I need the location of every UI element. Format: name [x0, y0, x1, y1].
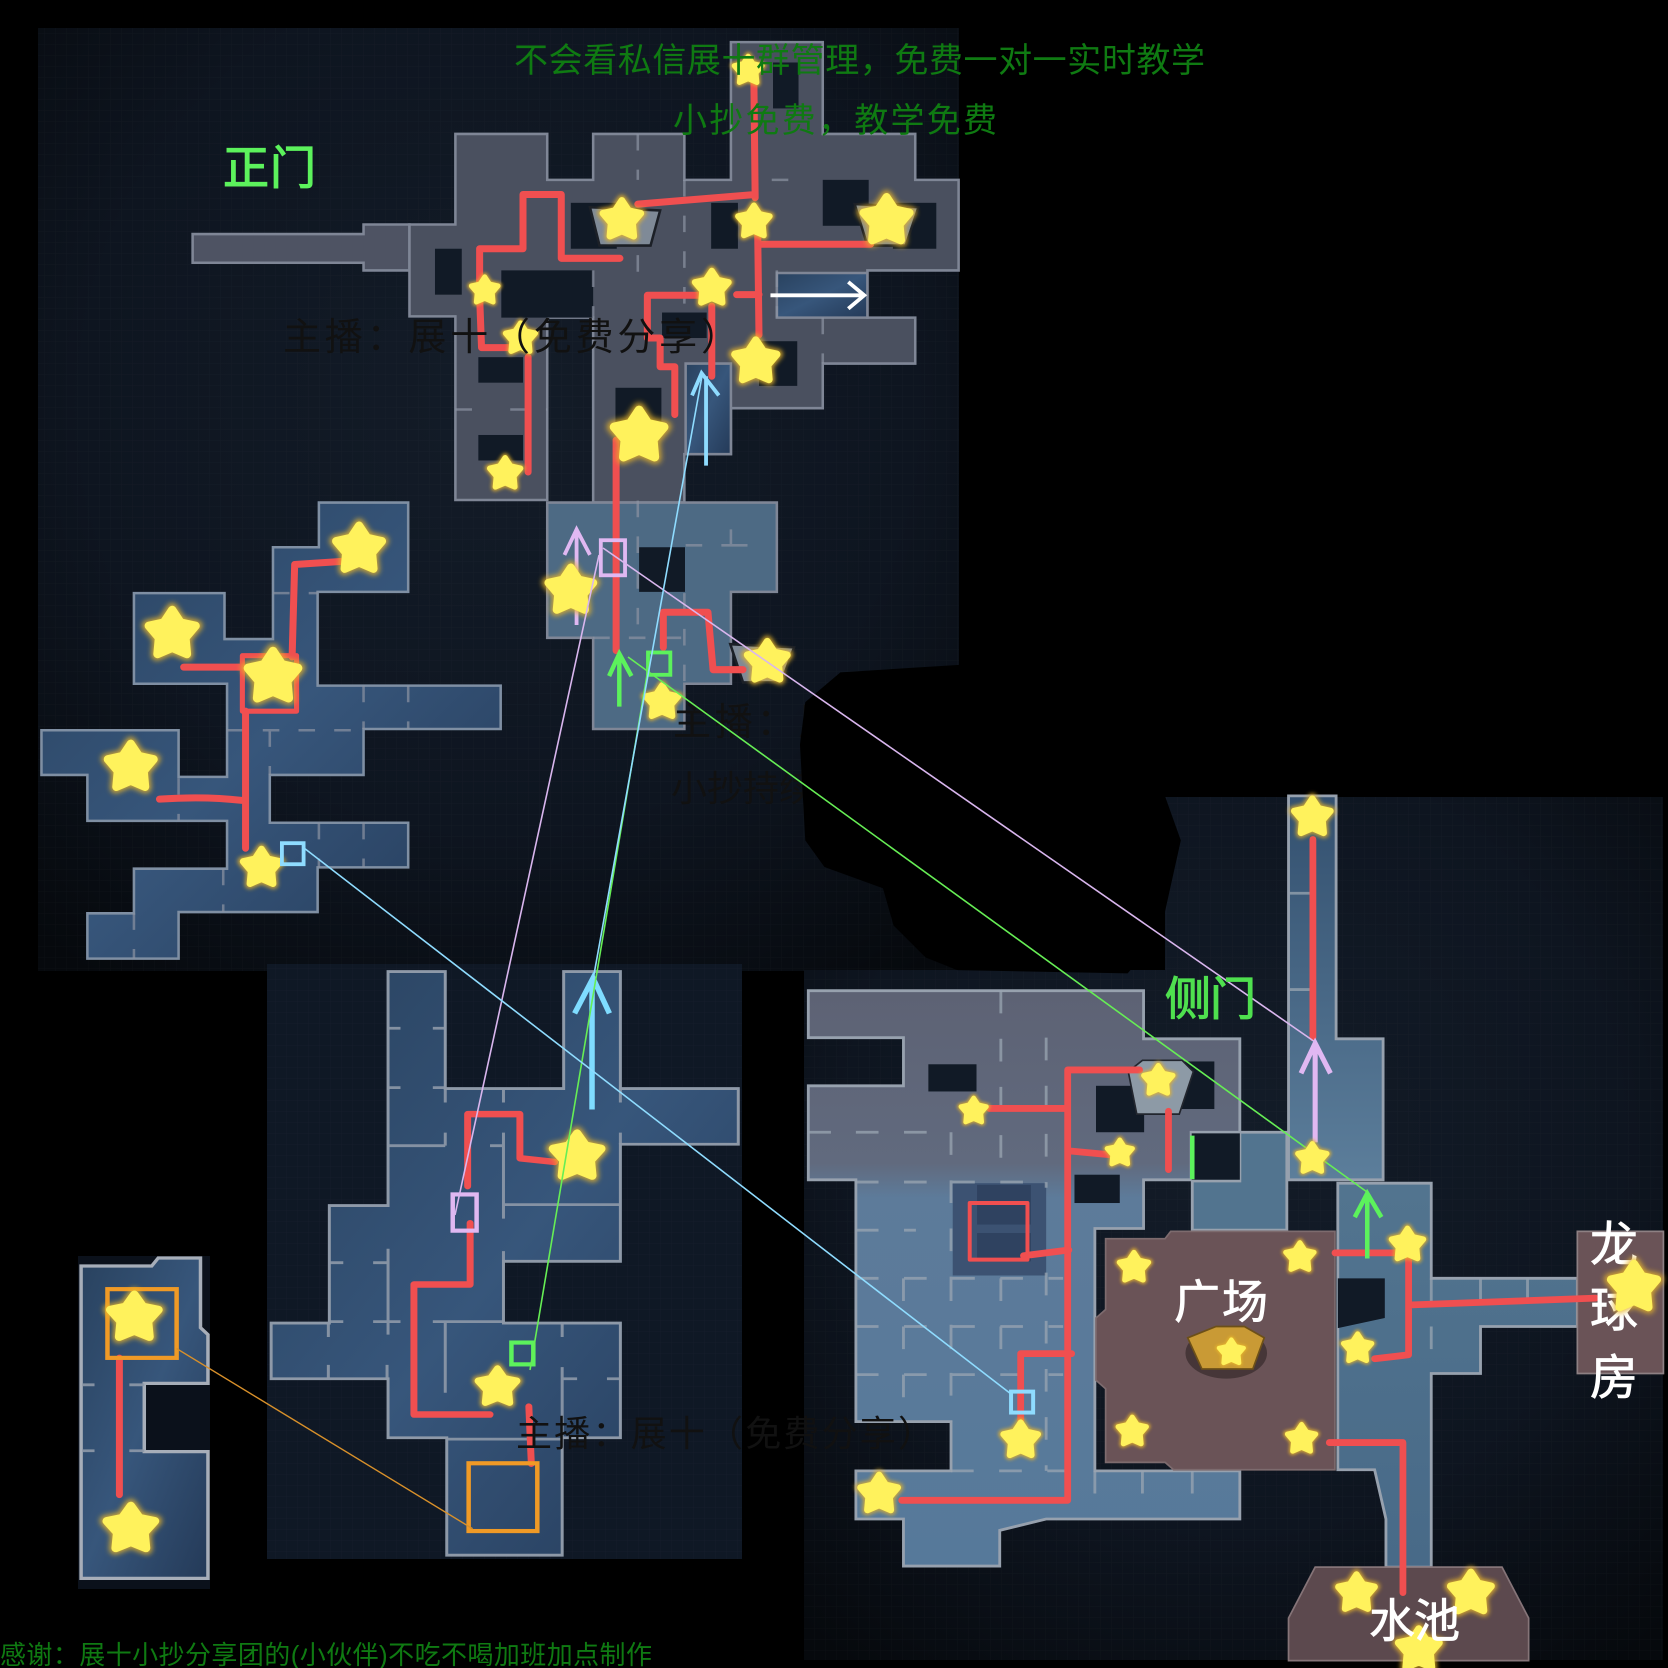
arrow: pink — [1301, 1043, 1330, 1142]
label: front door: 正门 — [223, 142, 316, 194]
text: copy note partly hidden: 小抄持续更新中 — [671, 768, 923, 809]
arrow: green — [1355, 1193, 1381, 1259]
room: pool — [1289, 1567, 1529, 1661]
map: front door floor plan — [41, 42, 959, 959]
icon: golden chest — [1185, 1326, 1267, 1379]
rooms: west building — [808, 796, 1577, 1567]
label: dragon ball room: 房 — [1590, 1352, 1638, 1405]
route: red path — [119, 1114, 555, 1495]
panel: side door map background — [804, 797, 1663, 1660]
room: plaza — [1096, 1231, 1335, 1470]
star: dragon ball room — [1610, 1263, 1658, 1308]
label: side door: 侧门 — [1165, 973, 1256, 1025]
stars: basement — [106, 1132, 602, 1549]
icons: stone chests — [590, 204, 918, 682]
stairs: dark stripes — [953, 1183, 1046, 1276]
rooms: dark holes — [435, 63, 936, 592]
room: basement — [271, 972, 738, 1555]
heading: free copy note: 小抄免费，教学免费 — [673, 102, 997, 140]
markers: coloured squares — [107, 1194, 537, 1531]
heading: group notice: 不会看私信展十群管理，免费一对一实时教学 — [514, 42, 1205, 80]
line: orange connector — [177, 1349, 473, 1529]
text: anchor credit partly hidden: 主播：展十（免费分享） — [673, 702, 1129, 744]
arrow: pink — [564, 529, 590, 625]
label: plaza: 广场 — [1174, 1276, 1268, 1328]
lines: cross-map connectors — [304, 376, 1367, 1394]
rooms: blue west wing — [41, 503, 501, 959]
panel: basement map background — [267, 964, 742, 1559]
room: small side room — [81, 1258, 208, 1578]
markers: coloured squares — [282, 540, 670, 864]
arrow: white — [770, 282, 864, 309]
panel: top map background — [38, 28, 959, 971]
label: dragon ball room: 球 — [1590, 1284, 1638, 1337]
route: red path — [902, 839, 1595, 1593]
stars: side door map — [860, 798, 1492, 1668]
label: dragon ball room — [1590, 1219, 1638, 1405]
stars: front door map — [107, 56, 911, 884]
label: pool: 水池 — [1369, 1595, 1460, 1647]
room: dragon ball room — [1577, 1231, 1663, 1373]
arrow: cyan — [692, 373, 719, 466]
route: red path — [159, 80, 871, 848]
map: side door floor plan — [808, 796, 1663, 1661]
text: anchor credit on basement: 主播：展十（免费分享） — [516, 1413, 934, 1454]
map: basement and small room — [81, 972, 738, 1578]
marker: cyan square — [1011, 1392, 1033, 1413]
panel: small room background — [78, 1256, 210, 1589]
mask: black blob — [800, 660, 1181, 973]
rooms: dark holes — [928, 1061, 1385, 1328]
rooms: grey upper building — [193, 42, 959, 729]
arrow: green — [609, 654, 631, 707]
arrow: cyan — [575, 978, 609, 1109]
label: dragon ball room: 龙 — [1590, 1219, 1638, 1272]
marker: green bar — [1188, 1136, 1196, 1179]
text: anchor credit on top map: 主播：展十（免费分享） — [283, 317, 739, 359]
icon: stone chest — [1128, 1060, 1193, 1114]
